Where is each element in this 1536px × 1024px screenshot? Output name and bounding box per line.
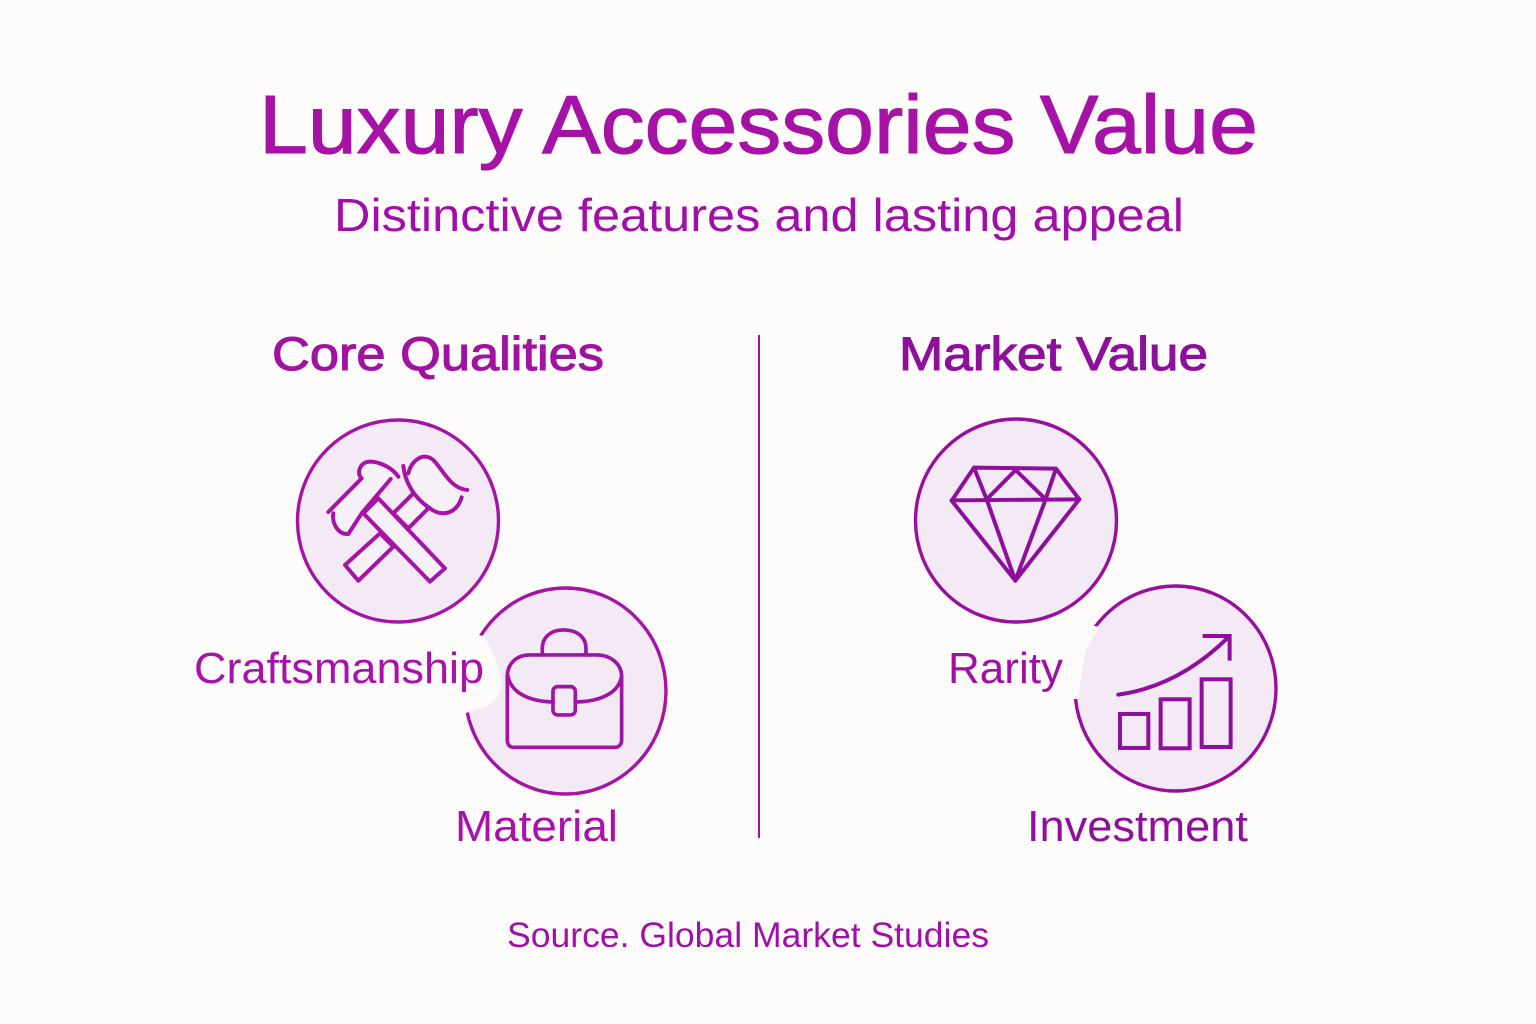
icon: diamond: [916, 419, 1116, 622]
source note: Source. Global Market Studies: [507, 916, 989, 955]
divider: [758, 335, 760, 838]
heading: core qualities: Core Qualities: [272, 327, 604, 380]
icon: briefcase: [440, 588, 666, 794]
label: investment: Investment: [1027, 802, 1248, 851]
panel: core qualities: [194, 327, 666, 851]
panel: market value: [899, 327, 1276, 851]
label: rarity: Rarity: [948, 644, 1063, 693]
icon: crossed hammers: [298, 420, 498, 622]
subtitle: Distinctive features and lasting appeal: [334, 189, 1184, 241]
title: Luxury Accessories Value: [259, 78, 1258, 171]
label: material: Material: [455, 802, 618, 851]
label: craftsmanship: Craftsmanship: [194, 644, 484, 693]
icon: growth chart: [1060, 586, 1276, 791]
heading: market value: Market Value: [899, 327, 1208, 380]
